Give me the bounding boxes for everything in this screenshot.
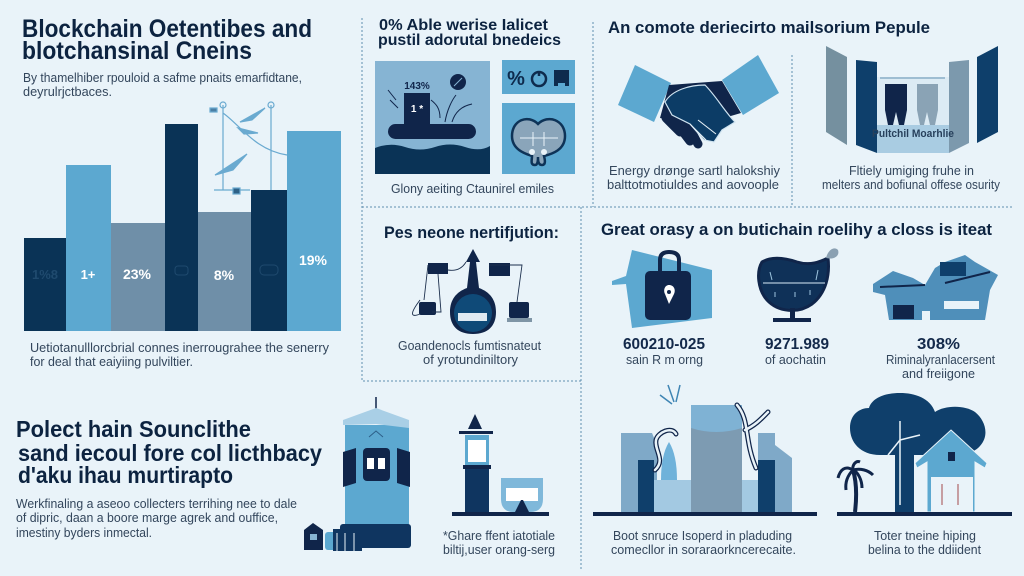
heading: bottom left: Polect hain Sounclithe — [16, 416, 251, 442]
stat: buildings: and freiigone — [902, 367, 975, 381]
stat: buildings — [873, 255, 998, 381]
illustration: submerged platform: 143% — [404, 81, 430, 92]
icon tile: symbols: % — [507, 68, 525, 90]
bar chart: 23% — [123, 266, 152, 282]
illustration: submerged platform — [375, 61, 490, 174]
icon: flask with arrow and wires — [412, 249, 532, 334]
text: bottom left body — [16, 497, 297, 540]
bar chart — [24, 124, 341, 331]
text: handshake caption: balttotmotiuldes and aovoople — [607, 178, 779, 192]
heading: bottom left: sand iecoul fore col licthbacy — [18, 440, 322, 466]
text: house caption: Toter tneine hiping — [874, 529, 976, 543]
text: bottom left body: Werkfinaling a aseoo collecters terrihing nee to dale — [16, 497, 297, 511]
text: certification caption: of yrotundiniltory — [423, 353, 519, 367]
stat: padlock: 600210-025 — [623, 336, 705, 353]
icon tile: symbols — [502, 60, 575, 94]
text: handshake caption: Energy drønge sartl halokshiy — [609, 164, 781, 178]
text: bottom left body: of dipric, daan a boore marge agrek and ouffice, — [16, 511, 278, 525]
text: industrial caption: Boot snruce Isoperd in pladuding — [613, 529, 792, 543]
text: handshake caption — [607, 164, 781, 192]
bar chart: 1+ — [81, 267, 96, 282]
text: small tower caption: *Ghare ffent iatotiale — [443, 529, 555, 543]
text: chart intro — [23, 71, 302, 99]
text: certification caption: Goandenocls fumtisnateut — [398, 339, 542, 353]
text: house caption — [868, 529, 982, 557]
text: bottom left body: imestiny byders inmectal. — [16, 526, 152, 540]
text: industrial caption — [611, 529, 796, 557]
stat: glass — [759, 248, 838, 367]
heading: statistics: Great orasy a on butichain roelihy a closs is iteat — [601, 220, 992, 239]
illustration: gallery panels: Pultchil Moarhlie — [872, 128, 954, 140]
stat: padlock: sain R m orng — [626, 353, 703, 367]
text: gallery caption: Fltiely umiging fruhe in — [849, 164, 974, 178]
text: gallery caption — [822, 164, 1001, 192]
stat: glass: 9271.989 — [765, 336, 829, 353]
bar chart: 19% — [299, 252, 328, 268]
icon: birds on wires — [210, 102, 287, 194]
heading: top middle: pustil adorutal bnedeics — [378, 32, 561, 49]
heading: top middle: 0% Able werise Ialicet — [379, 17, 549, 34]
text: small tower caption: biltij,user orang-serg — [443, 543, 555, 557]
text: chart caption: Uetiotanulllorcbrial connes inerrougrahee the senerry — [30, 341, 330, 355]
stat: buildings: Riminalyranlacersent — [886, 353, 995, 367]
illustration: house with tree and turbine — [837, 393, 1012, 516]
heading: chart: blotchansinal Cneins — [22, 37, 252, 65]
heading: certification: Pes neone nertifjution: — [384, 223, 559, 242]
heading: top middle — [378, 17, 561, 49]
text: chart intro: By thamelhiber rpouloid a safme pnaits emarfidtane, — [23, 71, 302, 85]
illustration: gallery panels — [826, 46, 998, 153]
text: house caption: belina to the ddiident — [868, 543, 982, 557]
text: certification caption — [398, 339, 542, 367]
panel: certification — [384, 223, 559, 367]
text: chart caption — [30, 341, 330, 369]
panel: top middle — [375, 17, 575, 196]
illustration: submerged platform: 1 * — [411, 104, 423, 115]
icon tile: heart device — [502, 103, 575, 174]
text: gallery caption: melters and bofiunal offese osurity — [822, 178, 1001, 192]
panel: statistics — [601, 220, 998, 381]
illustration: industrial complex — [593, 385, 817, 516]
illustration: tall tower — [304, 397, 411, 553]
heading: chart — [22, 15, 312, 65]
illustration: small tower and pod — [452, 414, 549, 516]
text: small tower caption — [443, 529, 555, 557]
bar chart: 1%8 — [32, 267, 58, 282]
heading: bottom left — [16, 416, 322, 488]
heading: chart: Blockchain Oetentibes and — [22, 15, 312, 43]
text: industrial caption: comecllor in soraraorkncerecaite. — [611, 543, 796, 557]
icon: handshake — [618, 55, 779, 144]
text: chart intro: deyrulrjctbaces. — [23, 85, 112, 99]
text: chart caption: for deal that eaiyiing pulviltier. — [30, 355, 193, 369]
panel: top right — [607, 18, 1001, 192]
panel: chart section — [22, 15, 341, 369]
stat: buildings: 308% — [917, 336, 960, 353]
bar chart: 8% — [214, 267, 235, 283]
panel: bottom left — [16, 397, 555, 557]
text: top middle caption: Glony aeiting Ctaunirel emiles — [391, 182, 554, 196]
heading: bottom left: d'aku ihau murtirapto — [18, 462, 233, 488]
stat: glass: of aochatin — [765, 353, 826, 367]
heading: top right: An comote deriecirto mailsorium Pepule — [608, 18, 930, 37]
panel: bottom right — [593, 385, 1012, 557]
stat: padlock — [612, 250, 712, 367]
